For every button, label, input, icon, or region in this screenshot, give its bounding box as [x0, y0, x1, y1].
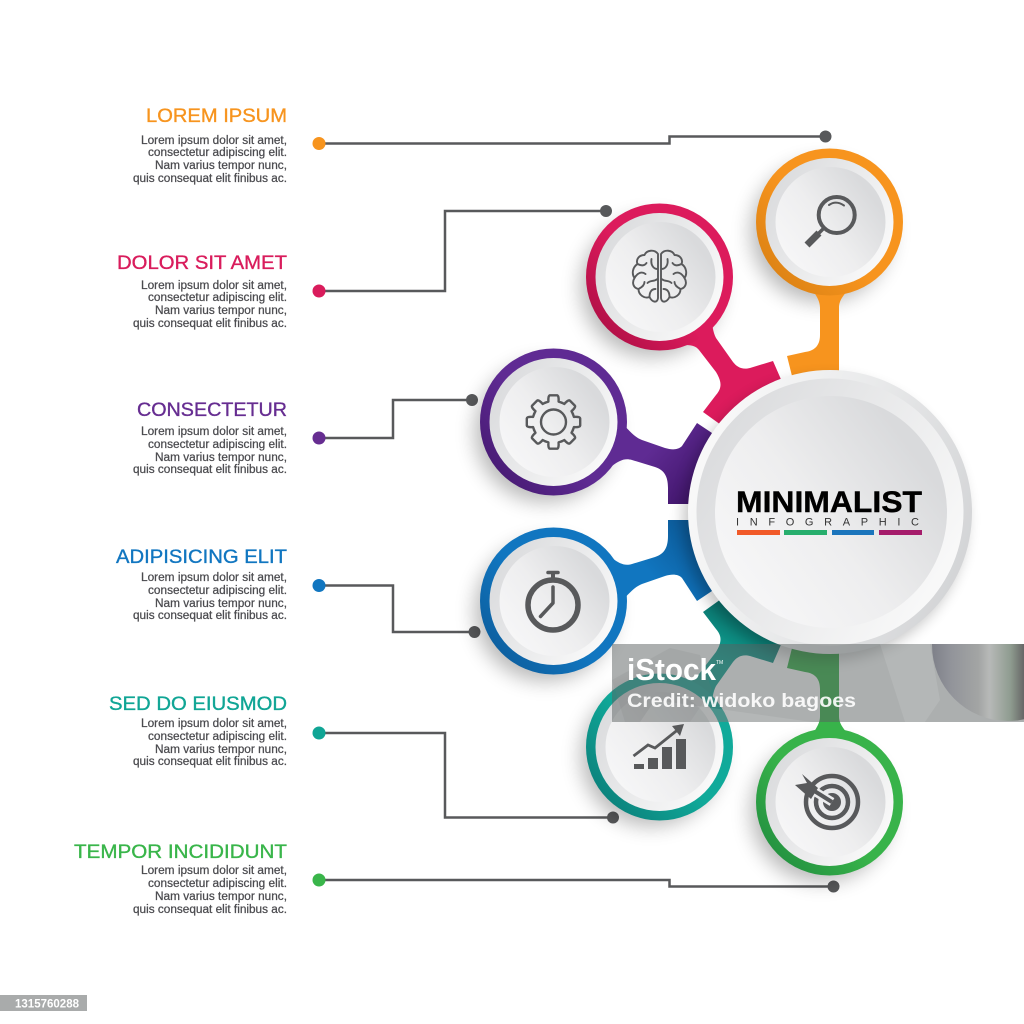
connector: green: [787, 624, 852, 739]
subtitle: infographic: INFOGRAPHIC: [736, 516, 919, 528]
image id tag: 1315760288: [15, 998, 80, 1010]
watermark credit: Credit: widoko bagoes: [627, 691, 856, 712]
text block: lorem ipsum: quis consequat elit finibus ac.: [133, 173, 287, 185]
text block: adipisicing elit: [116, 546, 287, 622]
text block: consectetur: quis consequat elit finibus ac.: [133, 464, 287, 476]
text block: dolor sit amet: DOLOR SIT AMET: [117, 252, 287, 274]
icon: brain: [633, 251, 686, 302]
text block: sed do eiusmod: consectetur adipiscing elit.: [148, 731, 287, 743]
watermark logo: iStock: [627, 652, 717, 687]
text block: lorem ipsum: Nam varius tempor nunc,: [155, 160, 287, 172]
connector: blue: [612, 520, 730, 604]
leader line: purple: [312, 394, 478, 444]
icon: target with arrow: [795, 774, 858, 828]
text block: sed do eiusmod: [109, 693, 287, 768]
text block: dolor sit amet: Lorem ipsum dolor sit amet,: [141, 280, 287, 292]
text block: dolor sit amet: quis consequat elit finibus ac.: [133, 318, 287, 330]
text block: sed do eiusmod: Nam varius tempor nunc,: [155, 744, 287, 756]
text block: dolor sit amet: Nam varius tempor nunc,: [155, 305, 287, 317]
node: orange magnifier: [756, 148, 903, 296]
leader line: blue: [312, 579, 480, 638]
icon: stopwatch: [528, 572, 578, 630]
node: blue stopwatch: [480, 528, 627, 674]
connector: crimson: [680, 318, 790, 435]
text block: consectetur: consectetur adipiscing elit.: [148, 439, 287, 451]
text block: tempor incididunt: quis consequat elit finibus ac.: [133, 904, 287, 916]
icon: magnifying glass: [807, 197, 855, 245]
text block: adipisicing elit: ADIPISICING ELIT: [116, 546, 287, 568]
soft shadows under the small circles: [475, 162, 891, 882]
text block: lorem ipsum: consectetur adipiscing elit.: [148, 147, 287, 159]
text block: dolor sit amet: consectetur adipiscing elit.: [148, 292, 287, 304]
leader line: green: [312, 874, 840, 892]
connector: orange: [787, 285, 852, 400]
text block: tempor incididunt: TEMPOR INCIDIDUNT: [74, 841, 287, 863]
text block: consectetur: Nam varius tempor nunc,: [155, 452, 287, 464]
text block: tempor incididunt: [74, 841, 287, 916]
connector: teal: [680, 589, 790, 706]
text block: sed do eiusmod: quis consequat elit finibus ac.: [133, 756, 287, 768]
text block: lorem ipsum: LOREM IPSUM: [146, 105, 287, 127]
icon: growth chart: [634, 724, 686, 769]
text block: tempor incididunt: Lorem ipsum dolor sit amet,: [141, 865, 287, 877]
connector: purple: [612, 420, 730, 504]
text block: adipisicing elit: Lorem ipsum dolor sit amet,: [141, 572, 287, 584]
text block: sed do eiusmod: SED DO EIUSMOD: [109, 693, 287, 715]
text block: dolor sit amet: [117, 252, 287, 330]
text block: tempor incididunt: consectetur adipiscing elit.: [148, 878, 287, 890]
leader line: crimson: [312, 205, 612, 298]
text block: adipisicing elit: quis consequat elit finibus ac.: [133, 610, 287, 622]
trademark: TM: [716, 660, 723, 666]
image id tag: [0, 995, 87, 1011]
watermark band: [612, 644, 1024, 722]
text block: consectetur: Lorem ipsum dolor sit amet,: [141, 426, 287, 438]
panel: central circle: [688, 370, 972, 654]
icon: gear: [527, 395, 580, 449]
text block: lorem ipsum: [133, 105, 287, 185]
text block: sed do eiusmod: Lorem ipsum dolor sit amet,: [141, 718, 287, 730]
text block: adipisicing elit: Nam varius tempor nunc,: [155, 598, 287, 610]
node: purple gear: [480, 348, 627, 496]
node: green target: [756, 728, 903, 876]
text block: lorem ipsum: Lorem ipsum dolor sit amet,: [141, 135, 287, 147]
text block: consectetur: CONSECTETUR: [137, 399, 287, 421]
leader line: teal: [312, 726, 619, 824]
text block: tempor incididunt: Nam varius tempor nunc,: [155, 891, 287, 903]
node: crimson brain: [586, 204, 733, 350]
leader line: orange: [312, 130, 832, 150]
colour bars: [737, 530, 922, 535]
shadow of the central circle: [683, 377, 967, 661]
text block: consectetur: [133, 399, 287, 476]
node: teal chart: [586, 674, 733, 820]
title: minimalist: MINIMALIST: [736, 486, 922, 519]
text block: adipisicing elit: consectetur adipiscing elit.: [148, 585, 287, 597]
